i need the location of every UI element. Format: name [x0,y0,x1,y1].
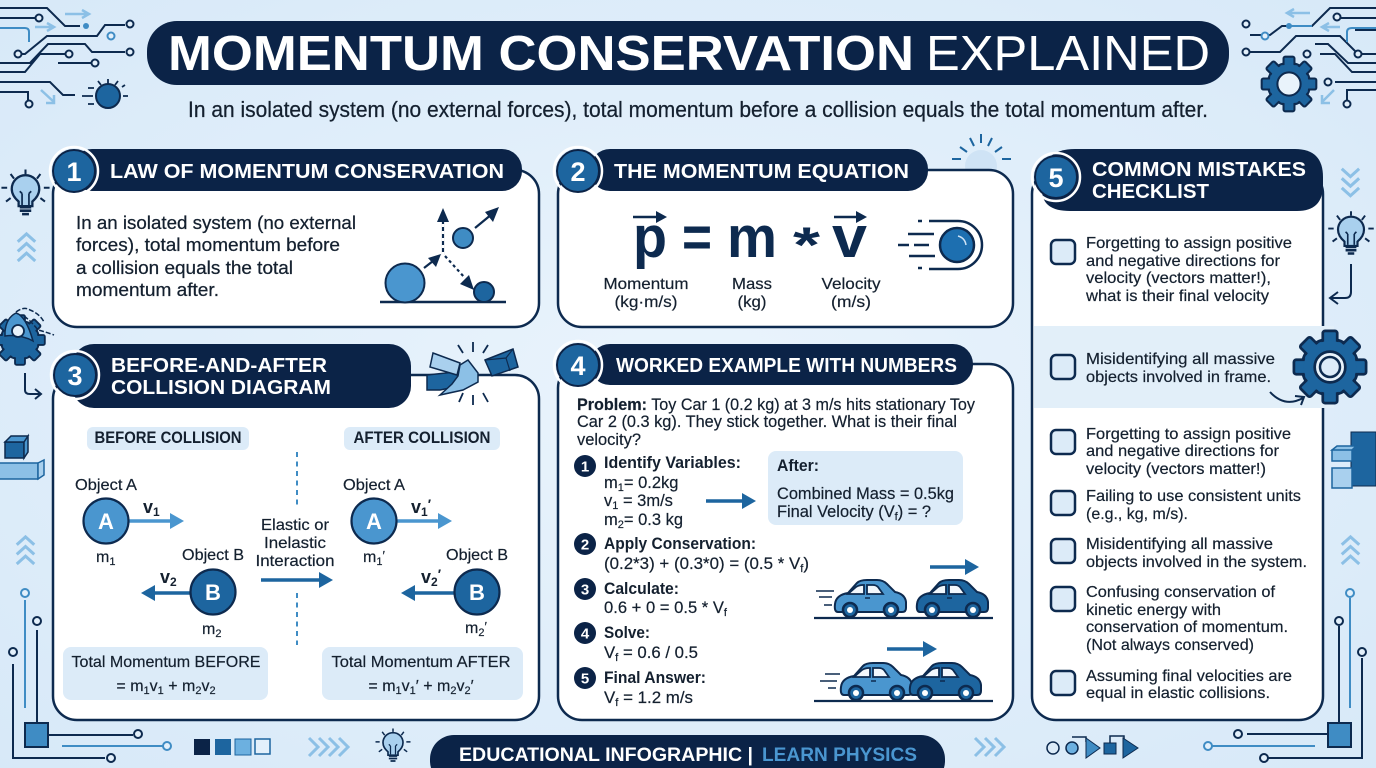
text: problem statement: Problem: Toy Car 1 (0.2 kg) at 3 m/s hits stationary Toy [577,396,976,414]
callout: total momentum before: 2 [209,685,216,697]
step 3: 3 [581,582,589,598]
icon: left smoking gear [0,308,54,365]
checklist item 1: what is their final velocity [1085,288,1269,305]
bottom-right chevrons [975,738,1004,756]
label: interaction with arrow: Interaction [256,553,334,570]
text: law description: In an isolated system (no external [76,212,356,233]
checklist item 6: Confusing conservation of [1086,584,1276,601]
callout: total momentum after: v [402,678,410,695]
callout: after values: After: [777,457,819,475]
step 2 [574,533,809,575]
arrow: left bent arrow [25,373,41,399]
step 5: V [604,689,615,707]
illustration: cars before collision [814,559,993,618]
decoration: top-right circuit and gear [1242,8,1376,111]
diagram: after state: 1 [421,505,428,519]
equation [633,205,867,273]
diagram: before state: v [143,497,153,517]
diagram: before state: 1 [109,556,115,568]
step 1: = 0.3 kg [624,511,683,529]
checklist item 6: conservation of momentum. [1086,619,1288,636]
checklist item 3: Forgetting to assign positive [1086,426,1291,443]
checklist item 3 [1051,426,1291,478]
equation labels: Mass [732,276,772,293]
step 2: (0.2*3) + (0.3*0) = (0.5 * V [604,555,796,573]
label: interaction with arrow [256,517,334,588]
equation: = [682,205,712,270]
diagram: after state: Object A [343,477,405,494]
diagram: before state: v [160,567,170,587]
step 4: f [615,652,619,664]
step 4 [574,622,698,664]
callout: total momentum before: v [150,678,158,695]
icon: bottom lightbulb [376,728,410,761]
callout: total momentum after: v [456,678,464,695]
decoration: top-left circuit [0,8,134,108]
callout: total momentum after: 1 [396,685,402,697]
diagram: after state: ′ [484,619,487,634]
text: problem statement: Car 2 (0.3 kg). They stick together. What is their final [577,413,957,431]
step 5 [574,667,706,709]
icon: right chevrons up [1342,537,1359,564]
heading: section 1 [50,147,522,195]
checklist item 2: objects involved in frame. [1086,369,1271,386]
callout: total momentum before: 1 [158,685,164,697]
icon: crashing blocks [427,342,518,405]
step 1 [574,454,741,531]
callout: total momentum after: 2 [450,685,456,697]
step 1: m [604,511,618,529]
callout: after values [768,451,963,525]
checklist item 6: (Not always conserved) [1086,637,1254,654]
icon: right chevrons down [1342,169,1359,196]
diagram: after state: A [366,509,382,534]
checklist item 7: Assuming final velocities are [1086,668,1292,685]
equation: p [633,205,667,270]
subtitle: In an isolated system (no external forces), total momentum before a collision equals the total momentum after. [188,97,1208,122]
callout: total momentum after: ′ + m [416,678,450,695]
highlighted row band [1034,326,1334,408]
text: problem statement: velocity? [577,431,641,449]
panel: momentum equation [554,147,1013,327]
diagram: after state: ′ [428,496,432,512]
checklist item 7 [1051,668,1292,702]
diagram: before state: 2 [215,628,221,640]
diagram: after state [343,477,508,639]
label: after collision: AFTER COLLISION [354,428,490,447]
legend squares [194,739,270,755]
heading: section 3: COLLISION DIAGRAM [111,376,331,399]
heading: section 5 [1032,149,1323,211]
equation: v [832,205,867,270]
equation: * [793,217,821,273]
decoration: bottom-left circuit [9,589,171,762]
step 2: f [800,563,804,575]
callout: total momentum after: 1 [410,685,416,697]
callout: total momentum before: 1 [144,685,150,697]
icon: left chevrons up [18,234,35,261]
title [147,21,1229,85]
step 3 [574,578,728,619]
step 1: 1 [618,482,624,494]
callout: total momentum before: v [201,678,209,695]
arrow: variables to after box [706,493,756,509]
equation labels [604,276,880,311]
checklist item 6: kinetic energy with [1086,602,1221,619]
panel: before-and-after collision diagram [51,342,539,720]
checklist item 7: equal in elastic collisions. [1086,685,1270,702]
diagram: after state: 2 [478,627,484,639]
step 1: 1 [581,458,589,476]
step 4: V [604,644,615,662]
checklist item 4: (e.g., kg, m/s). [1086,506,1188,523]
checklist item 4 [1051,488,1301,523]
step 3: 0.6 + 0 = 0.5 * V [604,599,723,617]
equation: m [727,205,777,270]
icon: right blocks [1332,432,1376,488]
diagram: before state: Object A [75,477,137,494]
step 2: 2 [581,536,589,554]
diagram: before state: m [202,621,215,638]
step 1: v [604,492,612,510]
step 3: Calculate: [604,580,679,598]
icon: left cube and bar [0,436,44,479]
text: problem statement [577,396,976,449]
step 4: = 0.6 / 0.5 [618,644,698,662]
text: law description: momentum after. [76,279,219,300]
step 5: = 1.2 m/s [618,689,693,707]
heading: section 3: BEFORE-AND-AFTER [111,354,327,377]
checklist item 5 [1051,536,1307,571]
diagram: before state [75,477,244,640]
diagram: after state: v [421,567,431,587]
heading: section 1: 1 [66,157,82,187]
step 1: = 0.2kg [624,474,678,492]
heading: section 4: WORKED EXAMPLE WITH NUMBERS [616,354,957,377]
step 4: 4 [581,626,590,642]
step 3: f [724,607,728,619]
step 1: Identify Variables: [604,454,741,472]
diagram: before state: m [96,549,109,566]
diagram: after state: m [363,549,376,566]
heading: section 5: COMMON MISTAKES [1092,158,1306,181]
icon: collision balls diagram [380,207,506,302]
decoration: bottom-right circuit [1204,589,1366,762]
heading: section 3 [51,344,411,408]
checklist item 1: Forgetting to assign positive [1086,235,1292,252]
callout: total momentum after: 2 [464,685,471,697]
checklist item 5: objects involved in the system. [1086,554,1307,571]
step 5: Final Answer: [604,669,706,687]
callout: total momentum before: + m [164,678,195,695]
label: before collision: BEFORE COLLISION [94,428,242,447]
checklist item 5: Misidentifying all massive [1086,536,1273,553]
bottom shapes row [1047,736,1138,758]
step 1: 1 [612,500,618,512]
heading: section 4 [554,341,973,389]
diagram: after state: 2 [431,575,438,589]
callout: total momentum before: 2 [195,685,201,697]
icon: right lightbulb [1328,211,1374,254]
icon: large gear [1294,331,1366,403]
diagram: before state: Object B [182,547,244,564]
callout: after values: ) = ? [898,503,931,521]
heading: section 3: 3 [67,361,83,391]
diagram: before state: A [98,509,114,534]
equation labels: (kg) [738,294,766,311]
diagram: after state: ′ [382,548,385,563]
step 4: Solve: [604,624,650,642]
step 2: ) [803,555,809,573]
checklist item 3: velocity (vectors matter!) [1086,461,1266,478]
icon: left lower chevrons [17,537,34,564]
checklist item 1: velocity (vectors matter!), [1086,270,1271,287]
callout: total momentum after: ′ [471,678,474,695]
callout: total momentum before: Total Momentum BEFORE [72,654,260,671]
title: MOMENTUM CONSERVATION [168,27,914,81]
panel: law of momentum conservation [50,147,539,327]
step 2: Apply Conservation: [604,535,756,553]
icon: left lightbulb [1,169,50,214]
label: interaction with arrow: Elastic or [261,517,330,534]
checklist item 1: and negative directions for [1086,253,1281,270]
footer banner: LEARN PHYSICS [762,745,917,766]
step 5: f [615,697,619,709]
equation labels: Velocity [822,276,880,293]
callout: after values: f [895,511,899,523]
diagram: before state: B [205,580,221,605]
diagram: after state: Object B [446,547,508,564]
text: law description: forces), total momentum before [76,234,340,255]
callout: total momentum after: = m [368,678,396,695]
diagram: after state: B [469,580,485,605]
panel: worked example [554,341,1013,720]
diagram: after state: 1 [376,556,382,568]
callout: after values: Combined Mass = 0.5kg [777,485,954,503]
callout: total momentum before: = m [116,678,144,695]
panel: common mistakes checklist [1032,149,1334,720]
text: law description: a collision equals the total [76,257,293,278]
step 1: m [604,474,618,492]
bottom-left chevrons [309,738,348,756]
step 1: = 3m/s [618,492,673,510]
arrow: gear curved arrow [1270,392,1304,405]
label: interaction with arrow: Inelastic [264,535,326,552]
checklist item 2 [1051,351,1275,386]
footer banner: EDUCATIONAL INFOGRAPHIC | [459,745,753,766]
diagram: after state: m [465,620,478,637]
checklist item 1 [1051,235,1292,305]
icon: moving ball [898,221,982,269]
title: EXPLAINED [926,27,1210,81]
callout: total momentum after [322,647,523,700]
footer banner [430,735,945,768]
callout: total momentum before [63,647,268,700]
checklist item 3: and negative directions for [1086,443,1280,460]
heading: section 5: 5 [1048,163,1064,193]
diagram: before state: 2 [170,575,177,589]
diagram: after state: ′ [438,566,442,582]
checklist item 2: Misidentifying all massive [1086,351,1275,368]
step 1: 2 [618,519,624,531]
diagram: before state: 1 [153,505,160,519]
arrow: right bent arrow [1330,264,1351,304]
heading: section 4: 4 [570,351,586,381]
heading: section 2: THE MOMENTUM EQUATION [614,160,909,183]
heading: section 2: 2 [570,157,586,187]
diagram: after state: v [411,497,421,517]
callout: total momentum after: Total Momentum AFTER [332,654,510,671]
heading: section 1: LAW OF MOMENTUM CONSERVATION [110,160,504,183]
checklist item 4: Failing to use consistent units [1086,488,1301,505]
equation labels: (m/s) [831,294,871,311]
checklist item 6 [1051,584,1288,654]
heading: section 5: CHECKLIST [1092,180,1209,203]
equation labels: (kg·m/s) [614,294,678,311]
step 5: 5 [581,670,589,688]
heading: section 2 [554,147,928,195]
icon: sun rays [952,134,1011,182]
callout: after values: Final Velocity (V [777,503,895,521]
illustration: cars after collision [814,641,993,701]
text: law description [76,212,356,300]
equation labels: Momentum [604,276,688,293]
